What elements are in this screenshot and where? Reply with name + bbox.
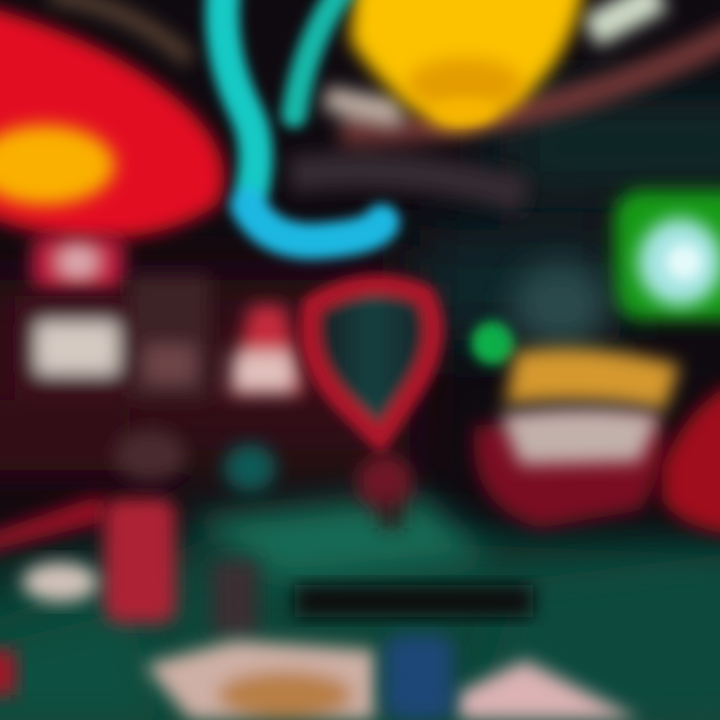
red left bottom — [0, 650, 16, 695]
left pink lamp — [32, 236, 124, 290]
dark head — [114, 429, 186, 481]
cyan neon ribbons — [222, 0, 382, 241]
cards — [145, 640, 640, 720]
grey stack — [212, 560, 258, 635]
red heart-shield outline — [309, 285, 434, 440]
yellow lamp — [350, 0, 585, 128]
red lamp yellow glow — [0, 125, 115, 205]
teal chip — [224, 444, 276, 492]
centre pin — [357, 454, 413, 528]
red chip stack — [104, 498, 176, 623]
blue chip — [385, 635, 453, 720]
red lamp — [0, 0, 225, 239]
top arcs — [50, 0, 720, 195]
table surface — [0, 495, 720, 720]
green dot — [471, 321, 515, 365]
dark bar — [295, 585, 533, 617]
green sign — [614, 190, 720, 320]
red band — [0, 495, 110, 556]
right machine — [474, 263, 720, 535]
white card left — [22, 562, 98, 602]
wall panels — [0, 275, 305, 470]
